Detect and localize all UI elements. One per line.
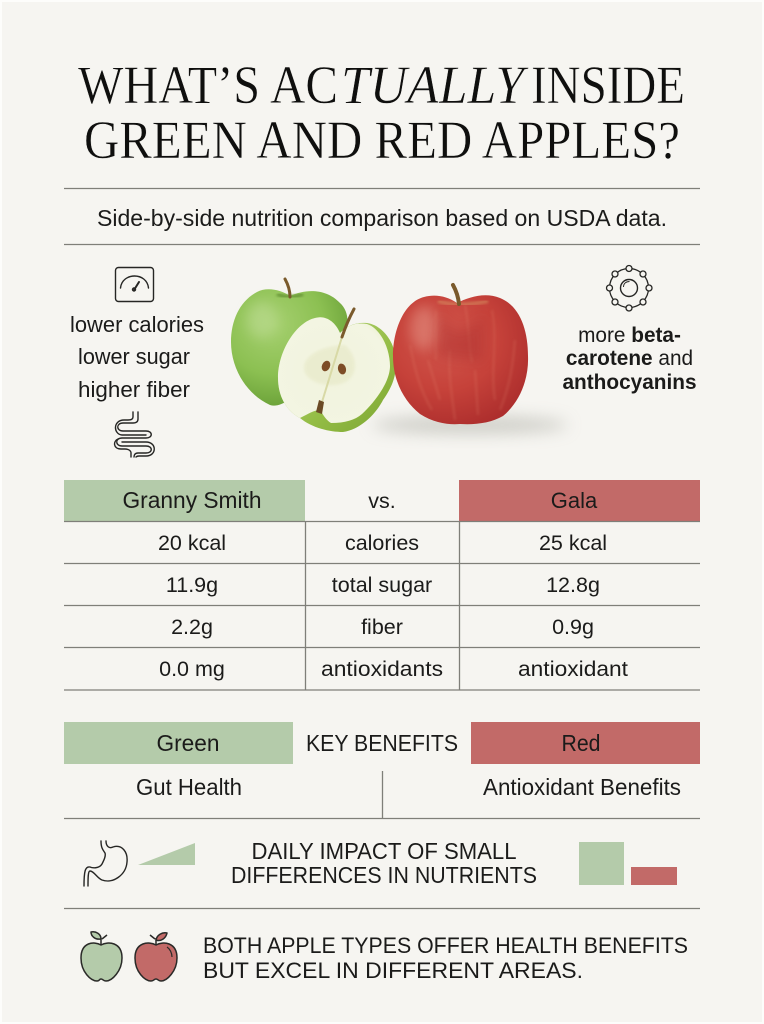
photo: green and red apples xyxy=(231,279,568,434)
left benefits text: lower sugar xyxy=(78,344,190,369)
chart: green wedge xyxy=(138,843,195,865)
left benefits text: higher fiber xyxy=(78,377,190,402)
banner: Green xyxy=(64,722,293,764)
table text: fiber xyxy=(361,615,403,639)
closing statement: BOTH APPLE TYPES OFFER HEALTH BENEFITS xyxy=(203,933,688,958)
chart: green and red bars xyxy=(579,842,677,885)
table text: calories xyxy=(345,531,419,555)
header: Gala xyxy=(459,480,700,521)
key benefits text xyxy=(136,730,681,800)
title: GREEN AND RED APPLES? xyxy=(84,110,680,170)
left benefits text xyxy=(70,312,204,402)
table text: antioxidants xyxy=(321,657,443,681)
icon: gauge xyxy=(116,268,154,302)
daily impact text: DAILY IMPACT OF SMALL xyxy=(252,838,517,864)
table text: 0.0 mg xyxy=(159,657,225,681)
icon: green apple xyxy=(81,932,122,981)
left benefits text: lower calories xyxy=(70,312,204,337)
icon: red apple xyxy=(135,933,177,981)
icon: molecule xyxy=(606,266,652,311)
key benefits text: Antioxidant Benefits xyxy=(483,774,681,800)
subtitle: Side-by-side nutrition comparison based on USDA data. xyxy=(97,205,667,231)
table text: antioxidant xyxy=(518,657,628,681)
right benefits text: carotene and xyxy=(566,347,693,370)
icon: stomach xyxy=(84,841,127,886)
title xyxy=(78,55,685,170)
key benefits section xyxy=(64,722,700,818)
table text: total sugar xyxy=(332,573,432,597)
comparison table xyxy=(64,480,700,690)
right benefits text xyxy=(562,324,697,394)
table text xyxy=(122,487,628,681)
key benefits text: Green xyxy=(156,730,220,756)
table text: 0.9g xyxy=(552,615,594,639)
red apple xyxy=(393,285,528,424)
header: Granny Smith xyxy=(64,480,305,521)
apple shadow xyxy=(372,416,568,434)
table text: 2.2g xyxy=(171,615,213,639)
key benefits text: KEY BENEFITS xyxy=(306,730,458,756)
key benefits text: Red xyxy=(562,730,600,756)
icon: intestines xyxy=(115,412,154,457)
closing statement xyxy=(203,933,688,983)
table text: 20 kcal xyxy=(158,531,226,555)
table text: Gala xyxy=(551,488,598,513)
daily impact text: DIFFERENCES IN NUTRIENTS xyxy=(231,862,537,888)
table text: Granny Smith xyxy=(122,487,262,513)
key benefits text: Gut Health xyxy=(136,774,242,800)
table text: 12.8g xyxy=(546,573,600,597)
right benefits text: anthocyanins xyxy=(562,371,697,394)
table text: 11.9g xyxy=(166,573,218,597)
right benefits text: more beta- xyxy=(578,324,681,347)
closing statement: BUT EXCEL IN DIFFERENT AREAS. xyxy=(203,958,583,983)
table text: vs. xyxy=(368,489,396,513)
cut green apple xyxy=(278,309,396,432)
table text: 25 kcal xyxy=(539,531,607,555)
title: WHAT’S xyxy=(78,55,260,115)
whole green apple xyxy=(231,279,348,406)
title: AC xyxy=(270,55,338,115)
banner: Red xyxy=(471,722,700,764)
title: TUALLY xyxy=(341,55,529,115)
title: INSIDE xyxy=(531,55,685,115)
daily impact text xyxy=(231,838,537,888)
table rules xyxy=(64,521,700,690)
